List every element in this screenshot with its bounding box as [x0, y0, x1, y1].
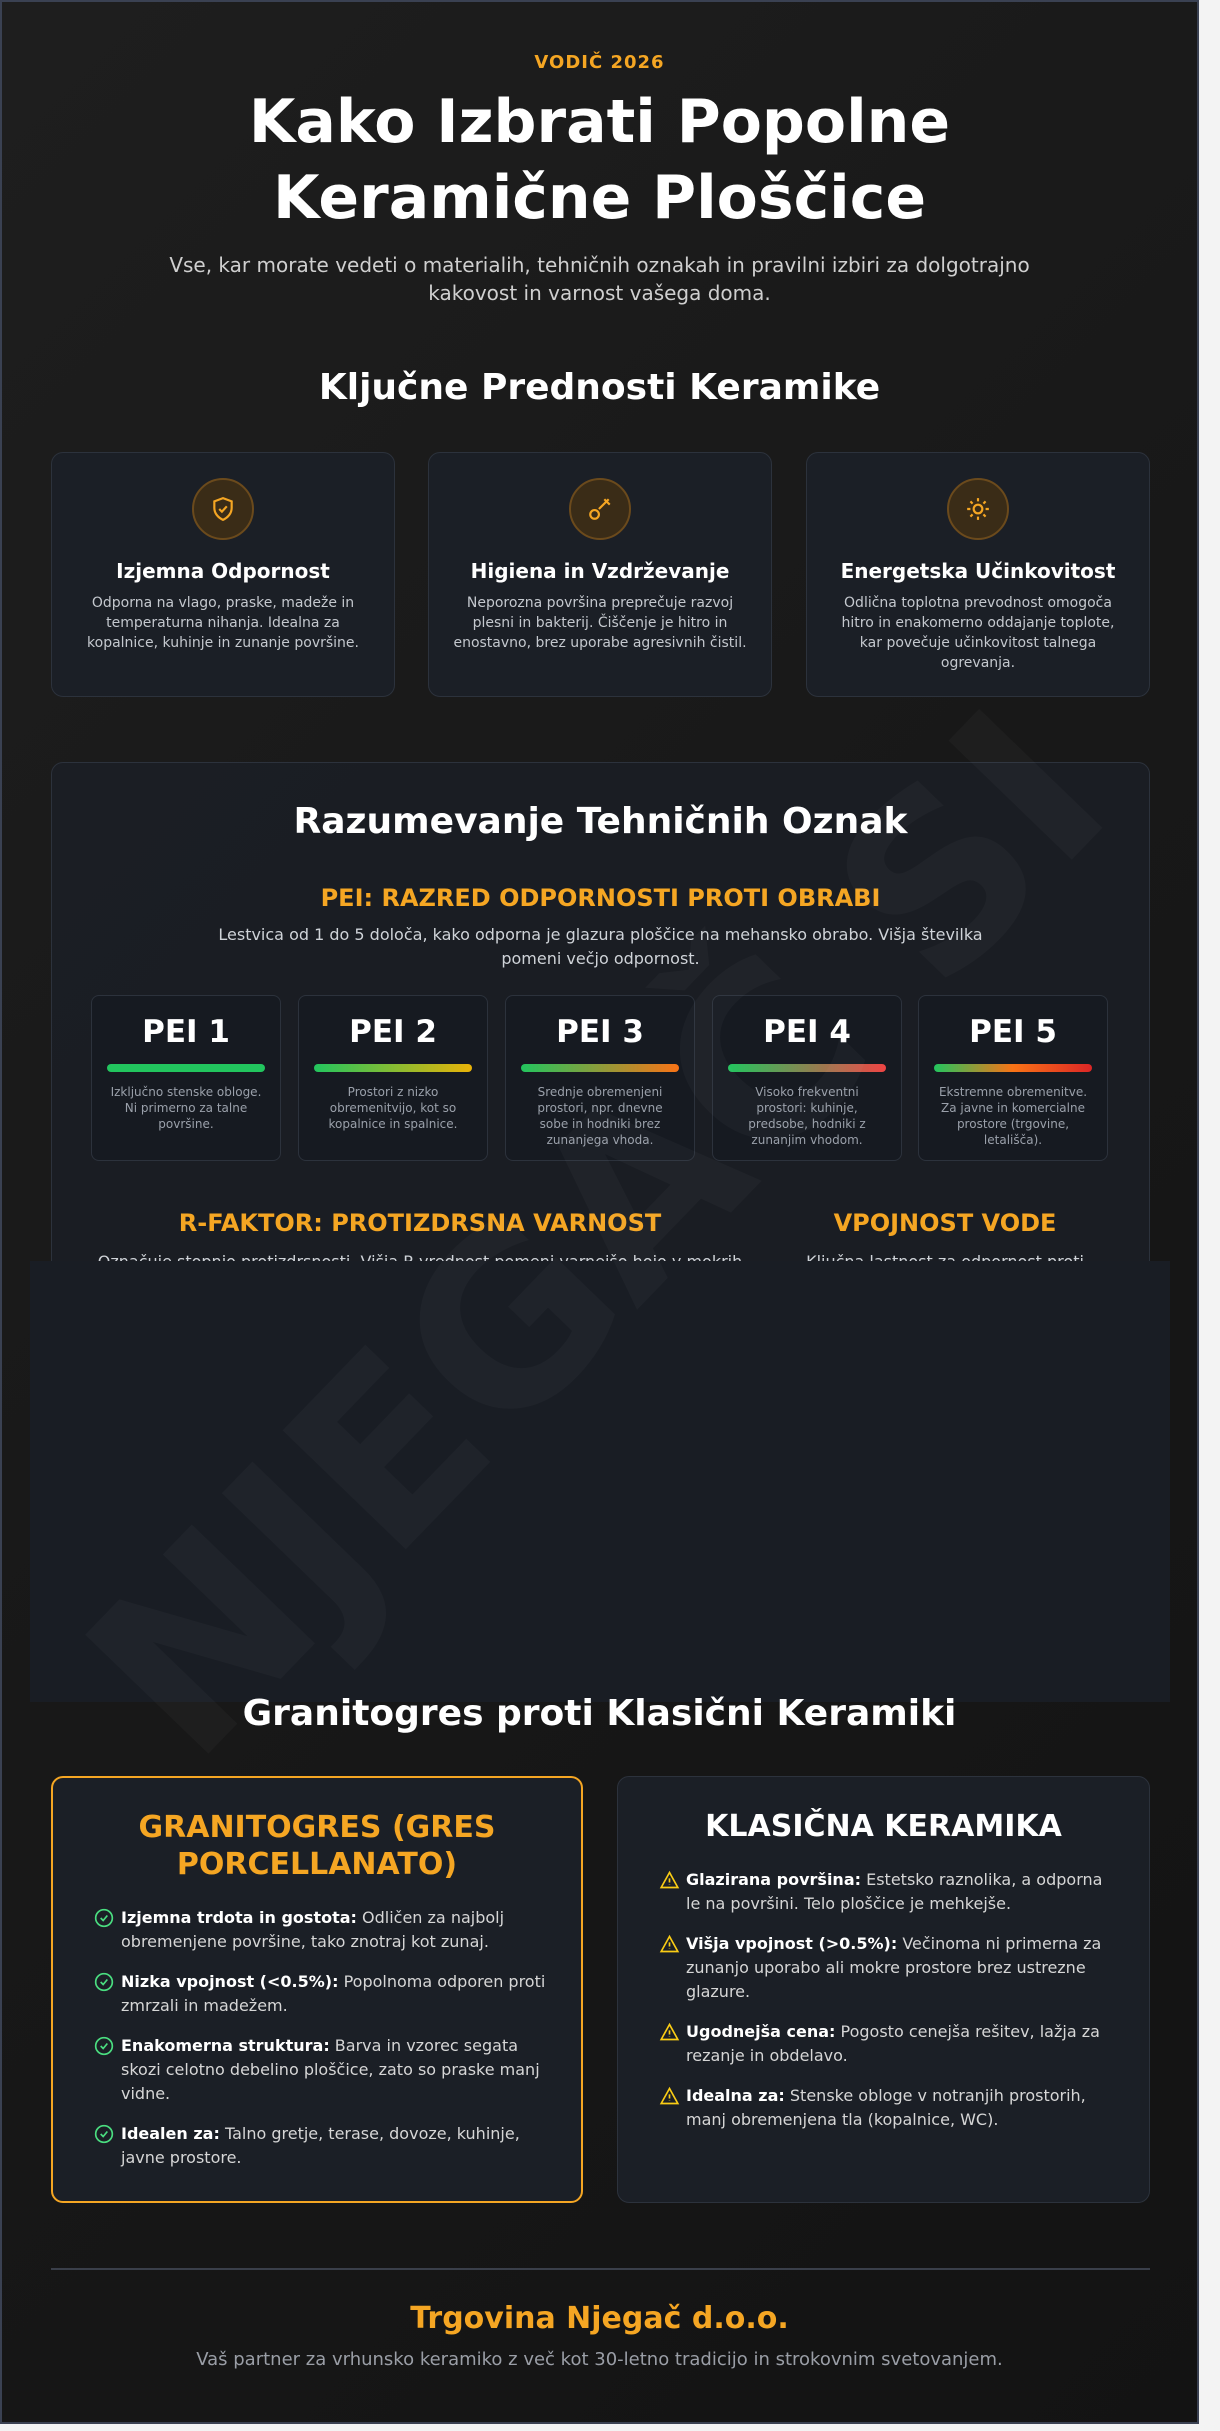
card text: temperaturna nihanja. Idealna za	[106, 615, 340, 631]
card text: enostavno, brez uporabe agresivnih čistil.	[453, 635, 747, 651]
panel: advantage 1	[51, 452, 395, 697]
card title: Higiena in Vzdrževanje	[471, 559, 729, 583]
PEI 5: letališča).	[984, 1133, 1042, 1147]
PEI 2: obremenitvijo, kot so	[330, 1101, 456, 1115]
card text: Odlična toplotna prevodnost omogoča	[844, 595, 1112, 611]
watermark: NJEGAČ SI	[37, 662, 1158, 1808]
card title: Izjemna Odpornost	[116, 559, 330, 583]
PEI subheading: PEI: RAZRED ODPORNOSTI PROTI OBRABI	[321, 884, 880, 912]
panel: advantage 2	[428, 452, 772, 697]
item 4: Idealen za: Talno gretje, terase, dovoze, kuhinje, javne prostore.	[121, 2124, 520, 2167]
PEI 3	[505, 995, 695, 1161]
PEI 5: prostore (trgovine,	[957, 1117, 1069, 1131]
PEI 3: PEI 3	[556, 1014, 644, 1050]
card text: kar povečuje učinkovitost talnega	[860, 635, 1096, 651]
card text: kopalnice, kuhinje in zunanje površine.	[87, 635, 359, 651]
PEI 4: Visoko frekventni	[755, 1085, 859, 1099]
PEI 2: Prostori z nizko	[348, 1085, 438, 1099]
card text	[842, 595, 1114, 671]
item 1: Izjemna trdota in gostota: Odličen za najbolj obremenjene površine, tako znotraj kot zunaj.	[121, 1908, 504, 1951]
PEI 1: površine.	[158, 1117, 214, 1131]
panel: classic ceramics	[617, 1776, 1150, 2203]
title: Kako Izbrati Popolne	[249, 87, 950, 157]
item 3: Ugodnejša cena: Pogosto cenejša rešitev, lažja za rezanje in obdelavo.	[686, 2022, 1100, 2065]
panel: granitogres	[51, 1776, 583, 2203]
panel title: GRANITOGRES (GRES	[138, 1810, 495, 1845]
list items	[660, 1870, 1102, 2129]
card text: Neporozna površina preprečuje razvoj	[467, 595, 733, 611]
card text: Odporna na vlago, praske, madeže in	[92, 595, 354, 611]
PEI 4	[712, 995, 902, 1161]
item 1: Glazirana površina: Estetsko raznolika, a odporna le na površini. Telo ploščice je mehkejše.	[686, 1870, 1102, 1913]
card text: ogrevanja.	[941, 655, 1015, 671]
list items	[94, 1908, 545, 2167]
heading: comparison: Granitogres proti Klasični Keramiki	[243, 1693, 956, 1734]
subtitle	[169, 253, 1030, 305]
panel title: KLASIČNA KERAMIKA	[705, 1809, 1062, 1844]
PEI 3: prostori, npr. dnevne	[537, 1101, 663, 1115]
PEI 4: predsobe, hodniki z	[748, 1117, 866, 1131]
water absorption heading: VPOJNOST VODE	[834, 1209, 1056, 1237]
PEI 3: zunanjega vhoda.	[547, 1133, 653, 1147]
subtitle: Vse, kar morate vedeti o materialih, tehničnih oznakah in pravilni izbiri za dolgotrajno	[169, 253, 1030, 277]
icon: shield	[192, 478, 254, 540]
footer text: Vaš partner za vrhunsko keramiko z več kot 30-letno tradicijo in strokovnim svetovanjem.	[196, 2349, 1003, 2370]
item 2	[94, 1972, 545, 2015]
PEI 5	[918, 995, 1108, 1161]
item 4: Idealna za: Stenske obloge v notranjih prostorih, manj obremenjena tla (kopalnice, WC).	[686, 2086, 1086, 2129]
title: Keramične Ploščice	[273, 163, 926, 233]
PEI 4: PEI 4	[763, 1014, 851, 1050]
panel: advantage 3	[806, 452, 1150, 697]
PEI 1: Izključno stenske obloge.	[111, 1085, 261, 1099]
panel title: PORCELLANATO)	[177, 1847, 457, 1882]
icon: brush	[569, 478, 631, 540]
card text: hitro in enakomerno oddajanje toplote,	[842, 615, 1114, 631]
PEI 1	[91, 995, 281, 1161]
PEI description: Lestvica od 1 do 5 določa, kako odporna je glazura ploščice na mehansko obrabo. Višja številka	[218, 925, 983, 944]
heading: key advantages: Ključne Prednosti Keramike	[319, 367, 880, 408]
R-factor heading: R-FAKTOR: PROTIZDRSNA VARNOST	[179, 1209, 661, 1237]
card text	[87, 595, 359, 651]
PEI 3: Srednje obremenjeni	[538, 1085, 662, 1099]
PEI 2: PEI 2	[349, 1014, 437, 1050]
panel title	[138, 1810, 495, 1882]
PEI 5: Za javne in komercialne	[941, 1101, 1085, 1115]
item 3: Enakomerna struktura: Barva in vzorec segata skozi celotno debelino ploščice, zato so praske manj vidne.	[121, 2036, 540, 2103]
footer title: Trgovina Njegač d.o.o.	[410, 2301, 789, 2336]
item 2: Nizka vpojnost (<0.5%): Popolnoma odporen proti	[121, 1972, 545, 1991]
icon: sun	[947, 478, 1009, 540]
item 2: Višja vpojnost (>0.5%): Večinoma ni primerna za zunanjo uporabo ali mokre prostore brez ustrezne glazure.	[686, 1934, 1101, 2001]
subtitle: kakovost in varnost vašega doma.	[428, 281, 771, 305]
PEI 2: kopalnice in spalnice.	[329, 1117, 457, 1131]
PEI 1: PEI 1	[142, 1014, 230, 1050]
PEI 2	[298, 995, 488, 1161]
PEI 5: PEI 5	[969, 1014, 1057, 1050]
panel: technical labels	[51, 762, 1150, 1702]
PEI 5: Ekstremne obremenitve.	[939, 1085, 1087, 1099]
water text (cut): Ključna lastnost za odpornost proti	[806, 1252, 1084, 1271]
PEI 4: zunanjim vhodom.	[751, 1133, 863, 1147]
PEI 1: Ni primerno za talne	[125, 1101, 247, 1115]
PEI 3: sobe in hodniki brez	[540, 1117, 660, 1131]
card text: plesni in bakterij. Čiščenje je hitro in	[473, 615, 727, 631]
PEI description	[218, 925, 983, 968]
PEI description: pomeni večjo odpornost.	[501, 949, 700, 968]
card title: Energetska Učinkovitost	[841, 559, 1115, 583]
heading: Razumevanje Tehničnih Oznak	[294, 801, 907, 842]
item 2: zmrzali in madežem.	[121, 1996, 288, 2015]
eyebrow: Vodič 2026: VODIČ 2026	[534, 52, 665, 73]
R-factor text (cut): Označuje stopnjo protizdrsnosti. Višja R-vrednost pomeni varnejšo hojo v mokrih	[98, 1252, 742, 1271]
PEI 4: prostori: kuhinje,	[756, 1101, 858, 1115]
card text	[453, 595, 747, 651]
overlay block	[30, 1261, 1170, 1702]
title	[249, 87, 950, 233]
